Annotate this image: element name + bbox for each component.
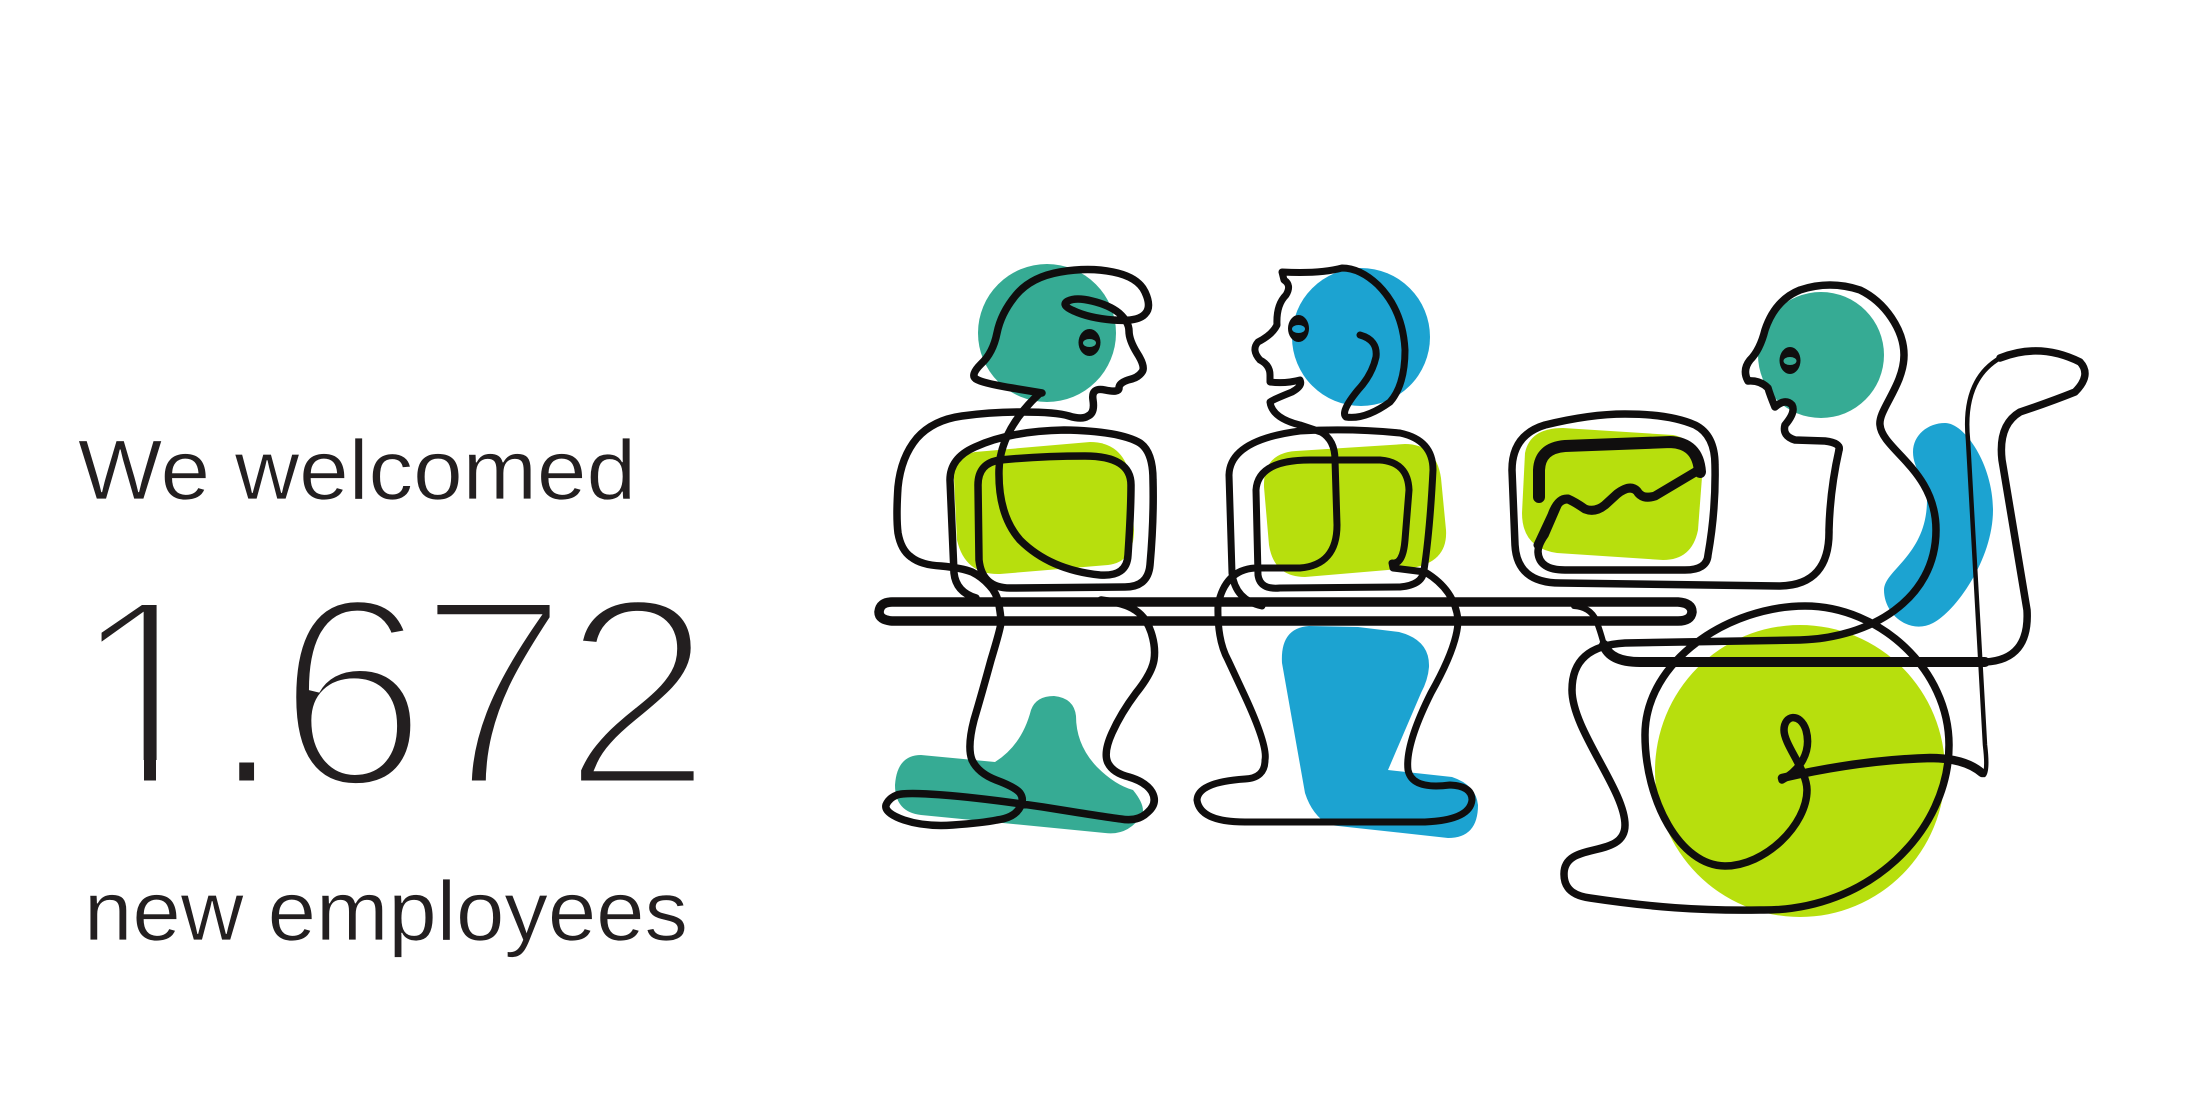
text: we welcomed: We welcomed	[78, 423, 636, 517]
colour shape: blue chair back	[1884, 423, 1993, 627]
line art: person 2 head, monitor and legs	[1197, 268, 1472, 822]
text: new employees: new employees	[84, 864, 688, 958]
line art: person 3 monitor and chart line	[1512, 414, 1839, 586]
line art: chair frame and base	[1574, 351, 2085, 778]
line art: person 1 monitor	[950, 393, 1153, 598]
line art: person 3 head, body and ball seat	[1564, 285, 1949, 910]
colour shape: lime screen 3	[1522, 428, 1702, 560]
illustration: three people working at a desk	[879, 264, 2085, 917]
line art: person 1 head, body and legs	[886, 270, 1155, 825]
colour shape: lime ball seat	[1655, 625, 1945, 917]
text: big number 1.672: 1.672	[70, 542, 713, 844]
colour shape: teal head of person 1	[978, 264, 1116, 402]
colour shape: blue legs of person 2	[1282, 626, 1478, 838]
icon: person 1 eye	[1078, 329, 1100, 356]
icon: person 3 eye	[1780, 347, 1800, 374]
icon: person 2 eye	[1288, 315, 1309, 342]
colour shape: teal head of person 3	[1758, 292, 1884, 418]
colour shape: teal legs of person 1	[895, 696, 1143, 833]
colour shape: lime screen 1	[954, 442, 1134, 574]
colour shape: lime screen 2	[1264, 444, 1446, 577]
colour shape: blue head of person 2	[1292, 268, 1430, 406]
line art: desk	[879, 602, 1692, 621]
